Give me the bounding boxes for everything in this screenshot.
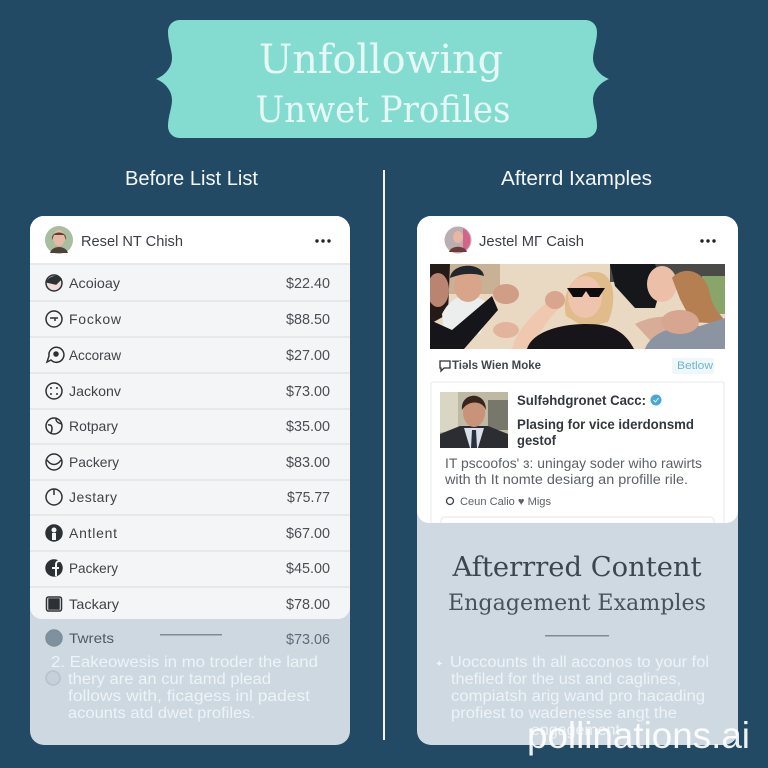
left column heading: Before List List xyxy=(125,168,258,190)
row amounts xyxy=(286,276,330,648)
row amounts: $75.77 xyxy=(287,490,330,506)
post header xyxy=(444,226,716,254)
photo: group of people xyxy=(427,264,725,349)
row amounts: $22.40 xyxy=(286,276,330,292)
lower body text: compiatsh arig wand pro hacading xyxy=(451,688,705,705)
row amounts: $78.00 xyxy=(286,597,330,613)
row names: Fockow xyxy=(69,311,122,327)
row amounts: $35.00 xyxy=(286,419,330,435)
panel: before list xyxy=(30,216,350,745)
card subtitle: Plasing for vice iderdonsmd xyxy=(517,417,694,432)
row names: Acoioay xyxy=(69,275,120,291)
center divider xyxy=(383,170,385,740)
nested profile card: Ceun Calio ♥ Migs xyxy=(460,496,551,508)
title banner: Unfollowing xyxy=(259,37,503,83)
nested profile card xyxy=(431,382,724,523)
post action row: Tiəls Wien Moke xyxy=(452,360,541,372)
row amounts: $88.50 xyxy=(286,312,330,328)
right column heading: Afterrd Ixamples xyxy=(501,168,652,190)
lower body text: engagement xyxy=(531,722,621,739)
short rule xyxy=(160,634,222,636)
title banner: Unwet Profiles xyxy=(256,90,510,131)
lower heading: Afterrred Content xyxy=(451,552,702,583)
post header: Jestel MΓ Caish xyxy=(479,234,584,250)
row amounts: $67.00 xyxy=(286,526,330,542)
card meta xyxy=(446,498,454,504)
title banner xyxy=(156,20,609,138)
row names: Rotpary xyxy=(69,418,118,434)
row names: Accoraw xyxy=(69,347,122,363)
row names: Packery xyxy=(69,454,119,470)
panel: after examples xyxy=(417,216,738,745)
row amounts: $45.00 xyxy=(286,561,330,577)
nested profile card: gestof xyxy=(517,433,556,448)
row names: Antlent xyxy=(69,525,117,541)
row separators xyxy=(30,263,350,588)
lower body text: ✦ xyxy=(435,659,443,670)
takeaway text: thery are an cur tamd plead xyxy=(68,671,271,688)
row names: Twrets xyxy=(69,630,114,646)
lower body text xyxy=(435,654,709,739)
row names: Jestary xyxy=(69,489,117,505)
row names: Packery xyxy=(69,560,118,576)
card body: IT pscoofos' ɜ: uningay soder wiho rawirts xyxy=(445,456,702,471)
row amounts: $83.00 xyxy=(286,455,330,471)
row names xyxy=(69,275,122,646)
row amounts: $73.00 xyxy=(286,384,330,400)
takeaway text xyxy=(51,654,318,722)
list header xyxy=(45,226,331,254)
takeaway text: 2. Eakeowesis in mo troder the land xyxy=(51,654,318,671)
lower body text: thefiled for the ust and caglines, xyxy=(451,671,681,688)
row amounts: $73.06 xyxy=(286,632,330,648)
post action row: Betlow xyxy=(677,360,713,372)
lower body text: profiest to wadenesse angt the xyxy=(451,705,677,722)
takeaway text: follows with, ficagess inl padest xyxy=(68,688,311,705)
portrait photo xyxy=(440,392,508,448)
panel: after examples: Engagement Examples xyxy=(448,591,706,616)
row names: Tackary xyxy=(69,596,119,612)
row icons xyxy=(46,275,64,685)
post action row xyxy=(440,358,714,374)
row names: Jackonv xyxy=(69,383,121,399)
lower body text: Uoccounts th all acconos to your fol xyxy=(450,654,709,671)
card title with badge: Sulfəhdgronet Cacc: xyxy=(517,393,646,408)
list header: Resel NT Chish xyxy=(81,234,183,250)
takeaway text: acounts atd dwet profiles. xyxy=(68,705,255,722)
nested profile card: with th It nomte desiarg an profille rile. xyxy=(444,472,688,487)
short rule xyxy=(545,635,609,636)
watermark: pollinations.ai xyxy=(527,715,750,756)
row amounts: $27.00 xyxy=(286,348,330,364)
